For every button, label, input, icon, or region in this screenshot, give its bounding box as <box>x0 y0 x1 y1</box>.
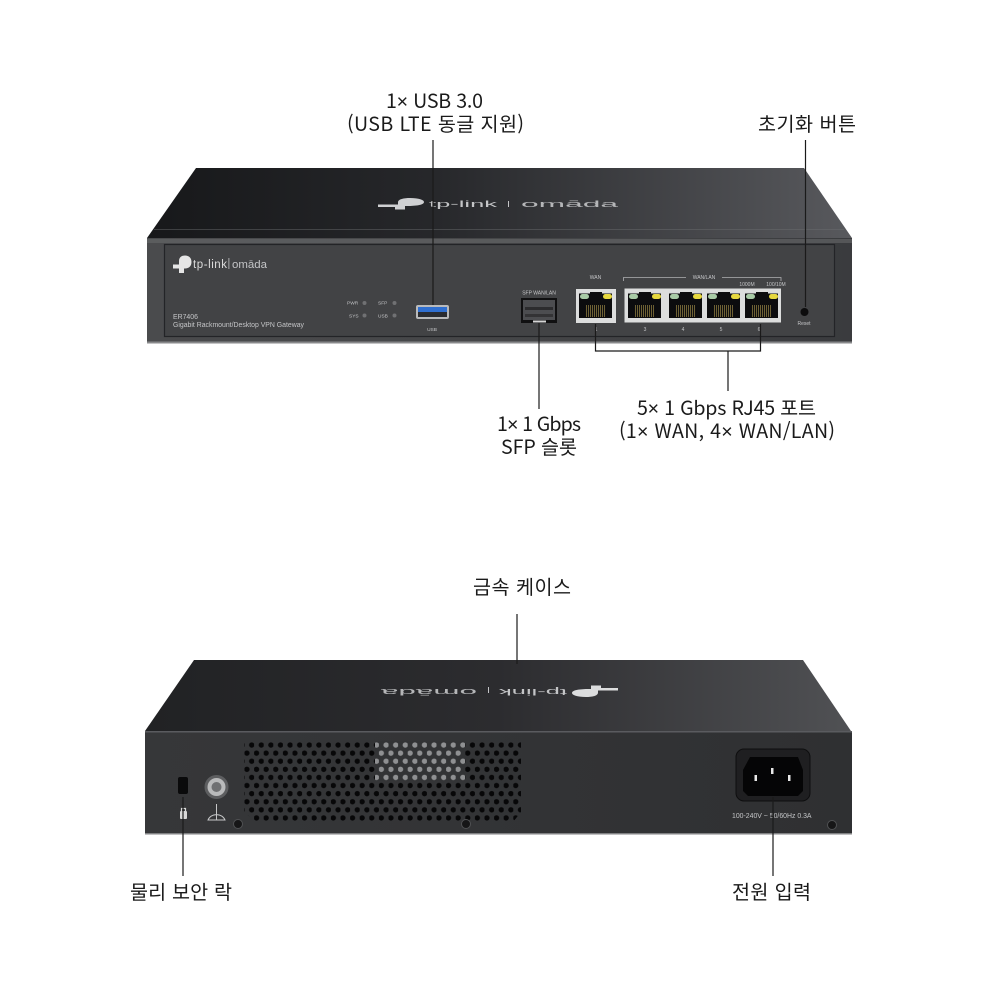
device: rear view <box>145 660 852 834</box>
label: USB port line 2: (USB LTE 동글 지원) <box>347 108 524 137</box>
USB port: USB <box>427 327 437 333</box>
label: SFP slot line 1: 1× 1 Gbps <box>497 408 581 437</box>
model text: Gigabit Rackmount/Desktop VPN Gateway <box>173 322 305 329</box>
front top logo <box>378 198 620 210</box>
leader: power <box>772 797 774 876</box>
rear top logo: tp-link <box>497 687 567 697</box>
grounding screw <box>204 775 228 820</box>
RJ45 ports: 3 <box>644 327 647 333</box>
power rating text: 100-240V ~ 50/60Hz 0.3A <box>732 813 812 820</box>
RJ45 ports: WAN <box>590 275 602 281</box>
status LEDs: PWR <box>347 300 359 306</box>
RJ45 ports: WAN/LAN <box>693 275 716 281</box>
RJ45 ports: 6 <box>758 327 761 333</box>
power inlet <box>736 749 810 801</box>
RJ45 ports: 1000M <box>739 282 755 288</box>
SFP slot <box>521 290 557 323</box>
label: reset button: 초기화 버튼 <box>758 108 856 137</box>
RJ45 ports: 100/10M <box>766 282 786 288</box>
reset button <box>797 308 811 327</box>
leader: lock <box>182 797 184 876</box>
leader: metal case <box>516 614 518 664</box>
reset button: Reset <box>797 321 811 327</box>
leader: RJ45 bracket <box>596 324 760 391</box>
rear face <box>145 731 852 834</box>
device: front view <box>147 168 852 344</box>
label: power input: 전원 입력 <box>732 876 811 905</box>
rear top cover <box>145 660 851 731</box>
front top logo: tp-link <box>429 199 499 209</box>
label: RJ45 ports line 1: 5× 1 Gbps RJ45 포트 <box>637 392 816 421</box>
status LEDs: SFP <box>378 300 387 306</box>
model text: ER7406 <box>173 314 198 321</box>
leader: reset <box>804 140 806 307</box>
front panel logo <box>173 256 268 273</box>
label: metal case: 금속 케이스 <box>473 571 571 600</box>
RJ45 ports: 5 <box>720 327 723 333</box>
label: SFP slot line 2: SFP 슬롯 <box>501 431 577 460</box>
front inset panel <box>164 244 834 336</box>
leader: SFP <box>538 323 540 409</box>
front top logo: omāda <box>521 200 620 209</box>
status LEDs <box>347 300 396 320</box>
RJ45 ports <box>576 274 786 333</box>
front panel logo: tp-link <box>193 259 227 271</box>
RJ45 ports: 1 <box>595 327 598 333</box>
front top cover <box>147 168 852 238</box>
front panel logo: omāda <box>232 259 268 271</box>
status LEDs: SYS <box>349 314 359 320</box>
rear top logo <box>379 686 618 697</box>
label: USB port line 1: 1× USB 3.0 <box>386 85 483 114</box>
rear top logo: omāda <box>379 687 477 696</box>
label: RJ45 ports line 2: (1× WAN, 4× WAN/LAN) <box>619 415 835 444</box>
vent grille <box>244 741 521 822</box>
leader: USB <box>432 140 434 305</box>
SFP slot: SFP WAN/LAN <box>522 290 556 296</box>
label: physical security lock: 물리 보안 락 <box>130 876 232 905</box>
front face <box>147 238 852 343</box>
status LEDs: USB <box>378 314 388 320</box>
USB port <box>416 305 449 333</box>
security lock slot <box>178 777 188 819</box>
RJ45 ports: 4 <box>682 327 685 333</box>
rear screws <box>234 820 836 830</box>
